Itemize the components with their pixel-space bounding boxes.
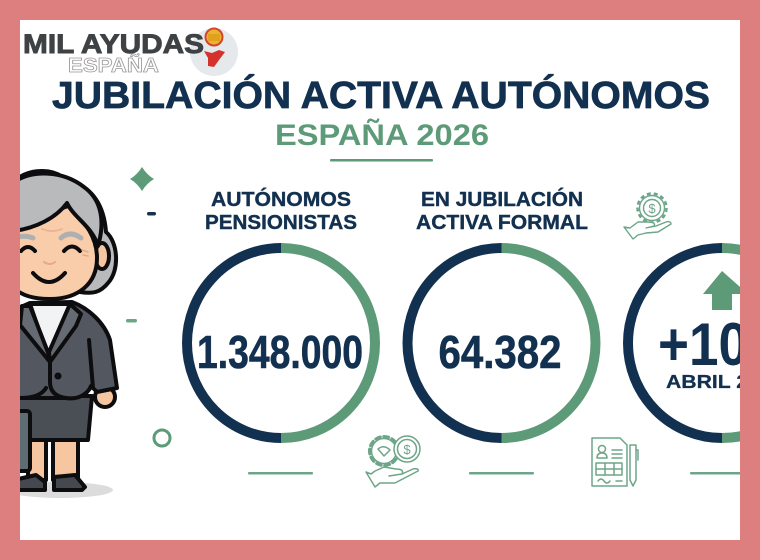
- logo: Mil Ayudas España: MIL AYUDAS: [23, 29, 204, 59]
- eyebrows: [18, 234, 81, 238]
- shirt: [30, 304, 70, 356]
- logo: Mil Ayudas España: [23, 28, 238, 77]
- logo: Mil Ayudas España: ESPAÑA: [68, 54, 159, 77]
- character: smiling senior woman in suit: [7, 171, 117, 498]
- stat value: 64.382: 64.382: [438, 326, 562, 378]
- button: [56, 374, 60, 378]
- jacket front line: [50, 362, 66, 398]
- nose: [44, 262, 55, 264]
- stat caption: abril: ABRIL 2: [666, 372, 748, 392]
- stat value: +10: +10: [658, 311, 748, 378]
- decor: navy dash: [147, 212, 156, 216]
- lapels: [20, 306, 50, 362]
- eyes: [21, 247, 35, 251]
- icon: document with pen: [592, 438, 638, 486]
- forehead wrinkle: [42, 229, 62, 231]
- stat heading: en jubilación activa formal: ACTIVA FORMAL: [416, 212, 588, 234]
- icon: green up arrow: [703, 271, 748, 310]
- stat value: 1.348.000: 1.348.000: [197, 326, 363, 378]
- hair back: [14, 171, 116, 293]
- left hem curve: [20, 388, 46, 398]
- decor: green ring: [154, 430, 170, 446]
- stat heading: autónomos pensionistas: AUTÓNOMOS: [211, 187, 351, 211]
- ear: [95, 243, 109, 269]
- decor: green line under first ring: [248, 472, 313, 474]
- stat ring: third, cropped: [628, 248, 760, 438]
- decor: green dash: [126, 319, 137, 322]
- icon: hand with gear and dollar: [624, 194, 671, 239]
- stat ring: 1.348.000: [187, 248, 375, 438]
- face: [14, 206, 97, 299]
- icon: hand with gear and dollar: $: [648, 201, 656, 216]
- cheek wrinkle: [82, 250, 88, 256]
- stat heading: en jubilación activa formal: EN JUBILACIÓN: [421, 187, 583, 211]
- icon: hand with gear and coin: [366, 436, 420, 487]
- icon: hand with gear and coin: $: [403, 442, 411, 457]
- stat ring: 64.382: [408, 248, 596, 438]
- sleeve line: [89, 340, 93, 388]
- hair fringe: [14, 174, 101, 246]
- legs: [28, 436, 46, 480]
- decor: green sparkle: [130, 167, 154, 191]
- ground shadow: [7, 482, 113, 498]
- hand: [95, 387, 115, 407]
- smile: [33, 273, 65, 282]
- subtitle underline: [330, 159, 433, 162]
- subtitle: ESPAÑA 2026: [275, 118, 489, 152]
- title: JUBILACIÓN ACTIVA AUTÓNOMOS: [52, 73, 710, 117]
- stat heading: autónomos pensionistas: PENSIONISTAS: [205, 212, 357, 234]
- jacket and arm: [14, 302, 117, 398]
- decor: green line under second ring: [469, 472, 534, 474]
- decor: green line under third ring: [690, 472, 750, 474]
- bag: [14, 411, 30, 471]
- shoes: [14, 475, 45, 490]
- skirt: [14, 396, 92, 440]
